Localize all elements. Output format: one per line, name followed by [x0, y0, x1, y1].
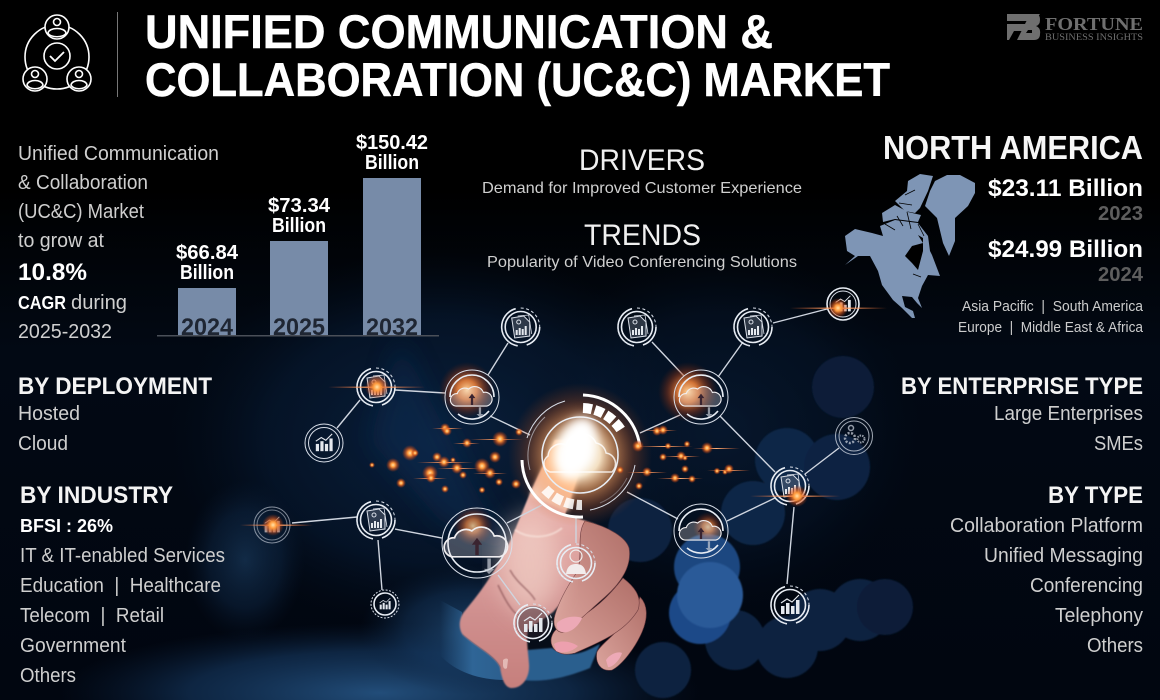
palm creases	[498, 570, 535, 615]
segment: by industry	[20, 482, 225, 687]
segment: by deployment: BY DEPLOYMENT	[18, 373, 212, 400]
North America statistics: NORTH AMERICA	[883, 129, 1143, 166]
bar 2024	[176, 242, 239, 341]
dark shadow under chart	[515, 615, 560, 655]
title: COLLABORATION (UC&C) MARKET	[145, 53, 890, 106]
market growth text: 10.8%	[18, 259, 87, 286]
drivers	[482, 144, 802, 197]
logo: Fortune Business Insights: BUSINESS INSIGHTS	[1045, 33, 1143, 43]
network links	[292, 309, 839, 605]
bar 2024: $66.84	[176, 242, 239, 264]
segment: by industry: BY INDUSTRY	[20, 482, 173, 509]
North America statistics: 2023	[1098, 203, 1143, 225]
node: chart small lower	[371, 590, 399, 618]
node: chart far left	[254, 507, 290, 543]
trends: TRENDS	[584, 219, 701, 252]
node: chart lower right	[771, 586, 809, 624]
node: cloud lower right	[674, 504, 728, 558]
node: chart top right	[827, 288, 859, 320]
bokeh lights	[608, 356, 913, 698]
segment: by industry: Government	[20, 635, 126, 657]
lit fingertip	[530, 440, 590, 512]
North America statistics	[883, 129, 1144, 336]
first finger	[554, 521, 630, 632]
hand pressing the interface	[440, 440, 646, 688]
palm highlight	[500, 515, 560, 615]
node: document top left	[502, 308, 540, 346]
second finger	[551, 578, 639, 654]
node: document top center	[618, 308, 656, 346]
market growth text: to grow at	[18, 230, 104, 252]
North America statistics: 2024	[1098, 264, 1144, 286]
bar chart: market size	[157, 132, 439, 341]
segment: by type: Unified Messaging	[984, 545, 1143, 567]
segment: by industry: IT & IT-enabled Services	[20, 545, 225, 567]
node: document glowing left	[357, 368, 395, 406]
North America statistics: Europe | Middle East & Africa	[958, 320, 1144, 336]
lower sleeve	[522, 644, 600, 681]
segment: by industry: Telecom | Retail	[20, 605, 164, 627]
node sparks	[365, 375, 389, 399]
nails	[557, 617, 582, 632]
bar 2024: 2024	[181, 314, 234, 341]
market growth text: & Collaboration	[18, 172, 148, 194]
trends	[487, 219, 797, 271]
market growth text: (UC&C) Market	[18, 201, 144, 223]
node: cloud upper right	[674, 370, 728, 424]
segment: by type: Conferencing	[1030, 575, 1143, 597]
node: person on hand	[557, 544, 595, 582]
market growth text: Unified Communication	[18, 143, 219, 165]
node: document lower left	[357, 501, 395, 539]
North America statistics: $24.99 Billion	[988, 236, 1143, 263]
left sleeve	[440, 600, 505, 680]
segment: by enterprise type: Large Enterprises	[994, 403, 1143, 425]
title	[145, 5, 890, 106]
market growth text: CAGR	[18, 293, 66, 313]
bar 2025	[268, 195, 331, 341]
drivers: Demand for Improved Customer Experience	[482, 180, 802, 197]
segment: by industry: Others	[20, 665, 76, 687]
node: gears	[836, 418, 872, 454]
palm and index finger	[460, 440, 629, 688]
node: document right	[771, 467, 809, 505]
segment: by industry: Education | Healthcare	[20, 575, 221, 597]
trends: Popularity of Video Conferencing Solutions	[487, 254, 797, 271]
node: cloud upper left	[445, 370, 499, 424]
market growth text	[18, 143, 219, 343]
market growth text: 2025-2032	[18, 321, 112, 343]
node: chart on hand	[514, 604, 552, 642]
segment: by deployment	[18, 373, 212, 455]
bar 2025: Billion	[272, 215, 326, 237]
segment: by type: BY TYPE	[1048, 482, 1143, 509]
node: cloud large lower left	[442, 508, 512, 578]
central glowing touch point	[508, 383, 652, 527]
map: North America	[845, 174, 975, 318]
third finger	[597, 597, 646, 670]
bar 2032: Billion	[365, 152, 419, 174]
segment: by enterprise type: BY ENTERPRISE TYPE	[901, 373, 1143, 400]
segment: by enterprise type: SMEs	[1094, 433, 1143, 455]
bar 2032	[356, 132, 428, 341]
segment: by enterprise type	[901, 373, 1143, 455]
logo: Fortune Business Insights: FORTUNE	[1045, 14, 1143, 34]
bar 2032: 2032	[366, 314, 418, 341]
North America statistics: $23.11 Billion	[988, 175, 1143, 202]
network nodes	[254, 288, 872, 642]
North America statistics: Asia Pacific | South America	[962, 299, 1144, 315]
left spark cluster	[440, 423, 450, 433]
cloud node glows	[439, 362, 723, 546]
segment: by deployment: Cloud	[18, 433, 68, 455]
segment: by type	[950, 482, 1143, 657]
bar 2025: 2025	[273, 314, 325, 341]
segment: by type: Collaboration Platform	[950, 515, 1143, 537]
right spark cluster	[652, 426, 662, 436]
light flares	[240, 308, 887, 526]
header icon: people around a check mark	[23, 15, 91, 91]
segment: by type: Others	[1087, 635, 1143, 657]
orange sparks	[240, 298, 887, 536]
node: document top right	[734, 308, 772, 346]
bar 2025: $73.34	[268, 195, 331, 217]
segment: by type: Telephony	[1055, 605, 1143, 627]
segment: by industry: BFSI : 26%	[20, 516, 113, 536]
node: chart left	[305, 424, 343, 462]
bar 2032: $150.42	[356, 132, 428, 154]
header divider	[117, 12, 118, 97]
bar 2024: Billion	[180, 262, 234, 284]
logo: Fortune Business Insights	[1007, 14, 1143, 43]
title: UNIFIED COMMUNICATION &	[145, 5, 773, 58]
segment: by deployment: Hosted	[18, 403, 80, 425]
market growth text: during	[71, 292, 127, 314]
drivers: DRIVERS	[579, 144, 705, 177]
